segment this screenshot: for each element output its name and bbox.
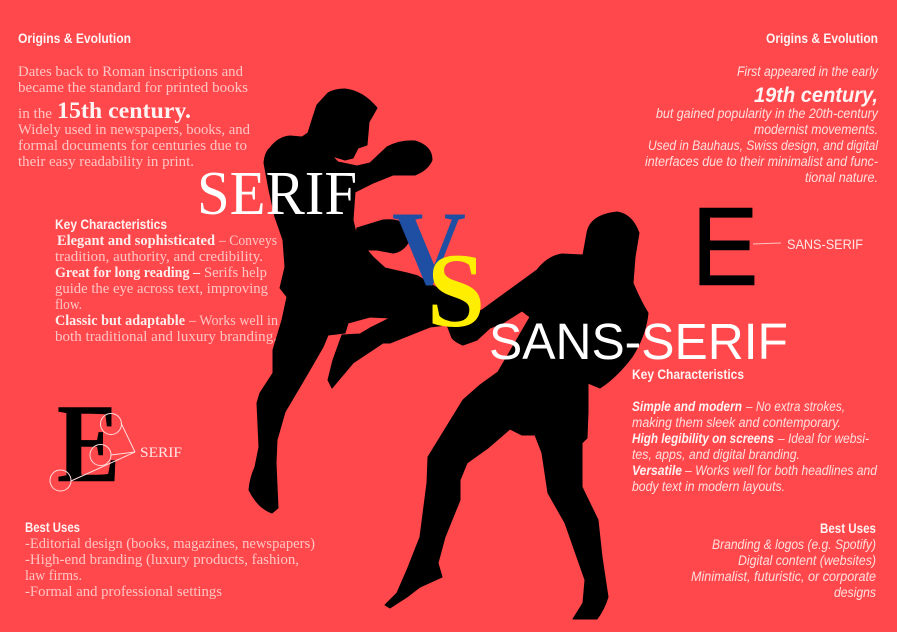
text block: serif origins and evolution: Origins & Evolution [18,31,131,46]
text block: sans-serif origins and evolution: modernist movements. [754,122,878,137]
letter S in yellow: S [427,232,485,349]
text block: serif best uses: law firms. [25,568,82,584]
text block: sans-serif key characteristics: making them sleek and contemporary. [632,415,841,430]
illustration: fighter silhouette punching, right [385,212,648,619]
text block: sans-serif best uses [691,521,876,600]
text block: serif origins and evolution: 15th century. [57,98,191,123]
text block: serif best uses: Best Uses [25,520,80,535]
diagram: serif letter E with callout circles and label [50,382,182,506]
text block: serif origins and evolution: Widely used in newspapers, books, and [18,122,250,138]
text block: sans-serif best uses: Minimalist, futuristic, or corporate [691,569,876,584]
text block: sans-serif origins and evolution: 19th century, [754,84,878,107]
text block: serif key characteristics: Elegant and sophisticated [57,233,216,249]
text block: serif key characteristics [55,217,278,345]
text block: serif key characteristics: Key Characteristics [55,217,167,232]
text block: sans-serif origins and evolution: tional nature. [805,170,878,185]
text block: sans-serif key characteristics: High legibility on screens [632,431,774,446]
text block: serif key characteristics: guide the eye across text, improving [55,281,268,297]
text block: sans-serif key characteristics: Key Characteristics [632,367,744,382]
diagram: sans-serif letter E with label [692,186,863,308]
text block: serif best uses: -Editorial design (books, magazines, newspapers) [25,536,315,552]
text block: sans-serif key characteristics: Simple and modern [632,399,742,414]
text block: serif origins and evolution: their easy readability in print. [18,154,194,170]
text block: sans-serif best uses: Best Uses [820,521,876,536]
text block: sans-serif key characteristics: – Ideal for websi- [777,431,869,446]
text block: serif key characteristics: – Conveys [218,233,277,249]
letter V in blue: V [392,190,466,307]
diagram: serif letter E with callout circles and label: SERIF [140,445,182,461]
text block: serif best uses: -High-end branding (luxury products, fashion, [25,552,299,568]
text block: serif key characteristics: both traditional and luxury branding. [55,329,277,345]
text block: serif key characteristics: – Works well in [188,313,278,329]
text block: sans-serif best uses: Branding & logos (e.g. Spotify) [712,537,876,552]
text block: sans-serif key characteristics: Versatile [632,463,682,478]
text block: sans-serif origins and evolution: Origins & Evolution [766,31,878,46]
text block: sans-serif best uses: Digital content (websites) [738,553,876,568]
text block: sans-serif key characteristics: – Works well for both headlines and [684,463,877,478]
text block: serif origins and evolution [18,31,250,170]
text block: serif key characteristics: Great for long reading – [55,265,200,281]
text block: sans-serif key characteristics [632,367,877,494]
illustration: fighter silhouette kicking, left [249,89,478,513]
heading: SANS-SERIF: SANS-SERIF [489,313,788,370]
diagram: sans-serif letter E with label: SANS-SERIF [787,236,863,252]
text block: sans-serif origins and evolution [645,31,879,185]
text block: serif best uses [25,520,315,600]
text block: sans-serif key characteristics: – No extra strokes, [745,399,845,414]
diagram: sans-serif letter E with label: E [692,186,758,308]
text block: serif key characteristics: Classic but adaptable [55,313,185,329]
text block: serif origins and evolution: Dates back to Roman inscriptions and [18,64,243,80]
heading: SERIF: SERIF [197,160,357,228]
text block: serif origins and evolution: in the [18,106,52,122]
text block: serif origins and evolution: became the standard for printed books [18,80,248,96]
text block: sans-serif origins and evolution: interfaces due to their minimalist and func- [645,154,878,169]
text block: serif key characteristics: Serifs help [204,265,267,281]
text block: serif best uses: -Formal and professional settings [25,584,222,600]
text block: serif origins and evolution: formal documents for centuries due to [18,138,247,154]
text block: serif key characteristics: flow. [55,297,82,313]
diagram: serif letter E with callout circles and label: E [57,382,120,506]
text block: sans-serif key characteristics: body text in modern layouts. [632,479,785,494]
text block: sans-serif key characteristics: tes, apps, and digital branding. [632,447,800,462]
text block: serif key characteristics: tradition, authority, and credibility. [55,249,263,265]
text block: sans-serif best uses: designs [834,585,876,600]
text block: sans-serif origins and evolution: but gained popularity in the 20th-century [656,106,879,121]
text block: sans-serif origins and evolution: First appeared in the early [737,64,879,79]
